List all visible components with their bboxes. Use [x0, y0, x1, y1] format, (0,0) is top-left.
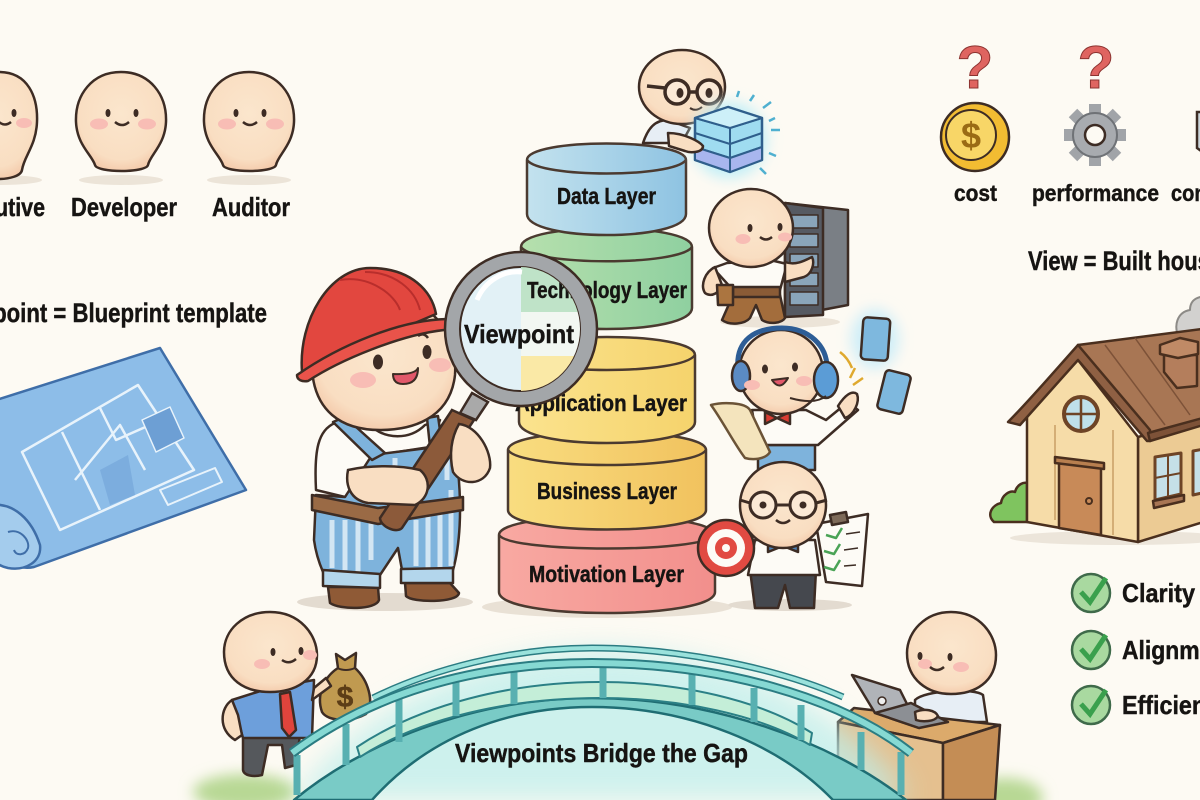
bridge: [292, 648, 911, 800]
icon: blueprint: [0, 348, 246, 569]
target: [698, 520, 754, 576]
roof: [1078, 328, 1200, 440]
layer: motivation: Motivation Layer: [529, 561, 684, 587]
stakeholder: auditor: [204, 72, 294, 222]
handle: [380, 410, 474, 530]
server rack: [785, 203, 848, 317]
panel: concerns: [941, 34, 1200, 206]
belt: [312, 495, 463, 524]
concern: cost: $: [961, 115, 981, 156]
lens label: Viewpoint: [464, 319, 574, 349]
phones: [840, 309, 911, 415]
hand pointing: [838, 393, 858, 418]
panel: benefits: [1072, 574, 1200, 724]
concern: cost: cost: [954, 180, 997, 206]
benefit: alignment: [1072, 631, 1200, 669]
smoke: [1176, 296, 1200, 345]
stakeholder: developer: [71, 72, 177, 222]
character: worker with hard hat: [297, 268, 473, 611]
clipboard: [816, 512, 868, 586]
top rails: [292, 663, 911, 753]
boots: [328, 587, 379, 608]
head: [312, 300, 455, 430]
money bag: [320, 653, 370, 720]
posts: [297, 665, 901, 795]
scroll: [711, 403, 770, 459]
character: developer at desk with laptop: [838, 612, 1000, 800]
hard hat: [302, 268, 436, 372]
layer: technology: Technology Layer: [527, 277, 687, 303]
concern: compliance: [1171, 112, 1200, 206]
panel: stakeholder heads: [0, 72, 294, 222]
lower rail band: [357, 682, 812, 757]
magnifying glass: [346, 250, 598, 532]
laptop: [852, 675, 948, 728]
layer: motivation: [482, 516, 732, 618]
benefit: efficiency: [1072, 686, 1200, 724]
layer: business: [508, 432, 706, 530]
stakeholder: executive: [0, 72, 45, 222]
layer: application: Application Layer: [515, 390, 687, 416]
round window: [1064, 397, 1098, 431]
bridge caption: Viewpoints Bridge the Gap: [455, 738, 748, 768]
concern: cost: [941, 34, 1009, 206]
fingers over the handle: [451, 424, 490, 482]
concern: performance: ?: [1078, 34, 1114, 101]
label: Developer: Developer: [71, 192, 177, 222]
character: server technician: [703, 189, 848, 328]
deck: [294, 698, 906, 800]
shirt: [316, 420, 440, 497]
glow: [300, 650, 905, 800]
layer: data: [527, 144, 686, 235]
character: analyst with target and checklist: [698, 462, 868, 611]
concern: cost: ?: [957, 34, 993, 101]
character: data engineer with cube: [639, 50, 780, 178]
benefit: clarity: [1072, 574, 1195, 612]
layer stack: [482, 144, 732, 618]
glowing data cube: [691, 91, 780, 178]
layer: data: Data Layer: [557, 183, 656, 209]
character: business person with money bag: [223, 612, 370, 776]
desk: [838, 708, 1000, 800]
side windows: [1155, 453, 1181, 500]
concern: performance: [1032, 34, 1159, 206]
magnifying glass: Technology Layer: [527, 277, 687, 303]
chimney: [1164, 355, 1197, 388]
character: support agent with headset: [711, 309, 911, 470]
concern: performance: performance: [1032, 180, 1159, 206]
ground grass: [193, 774, 1043, 800]
label: Auditor: Auditor: [212, 192, 290, 222]
door: [1059, 463, 1101, 535]
walls: [1138, 417, 1200, 542]
illustration: house: [990, 296, 1200, 545]
money bag: $: [337, 681, 354, 714]
layer: business: Business Layer: [537, 478, 677, 504]
lens: [445, 252, 597, 406]
bush: [990, 483, 1027, 522]
layer: application: [515, 337, 695, 443]
layer: technology: [521, 228, 692, 329]
overalls: [314, 445, 460, 575]
